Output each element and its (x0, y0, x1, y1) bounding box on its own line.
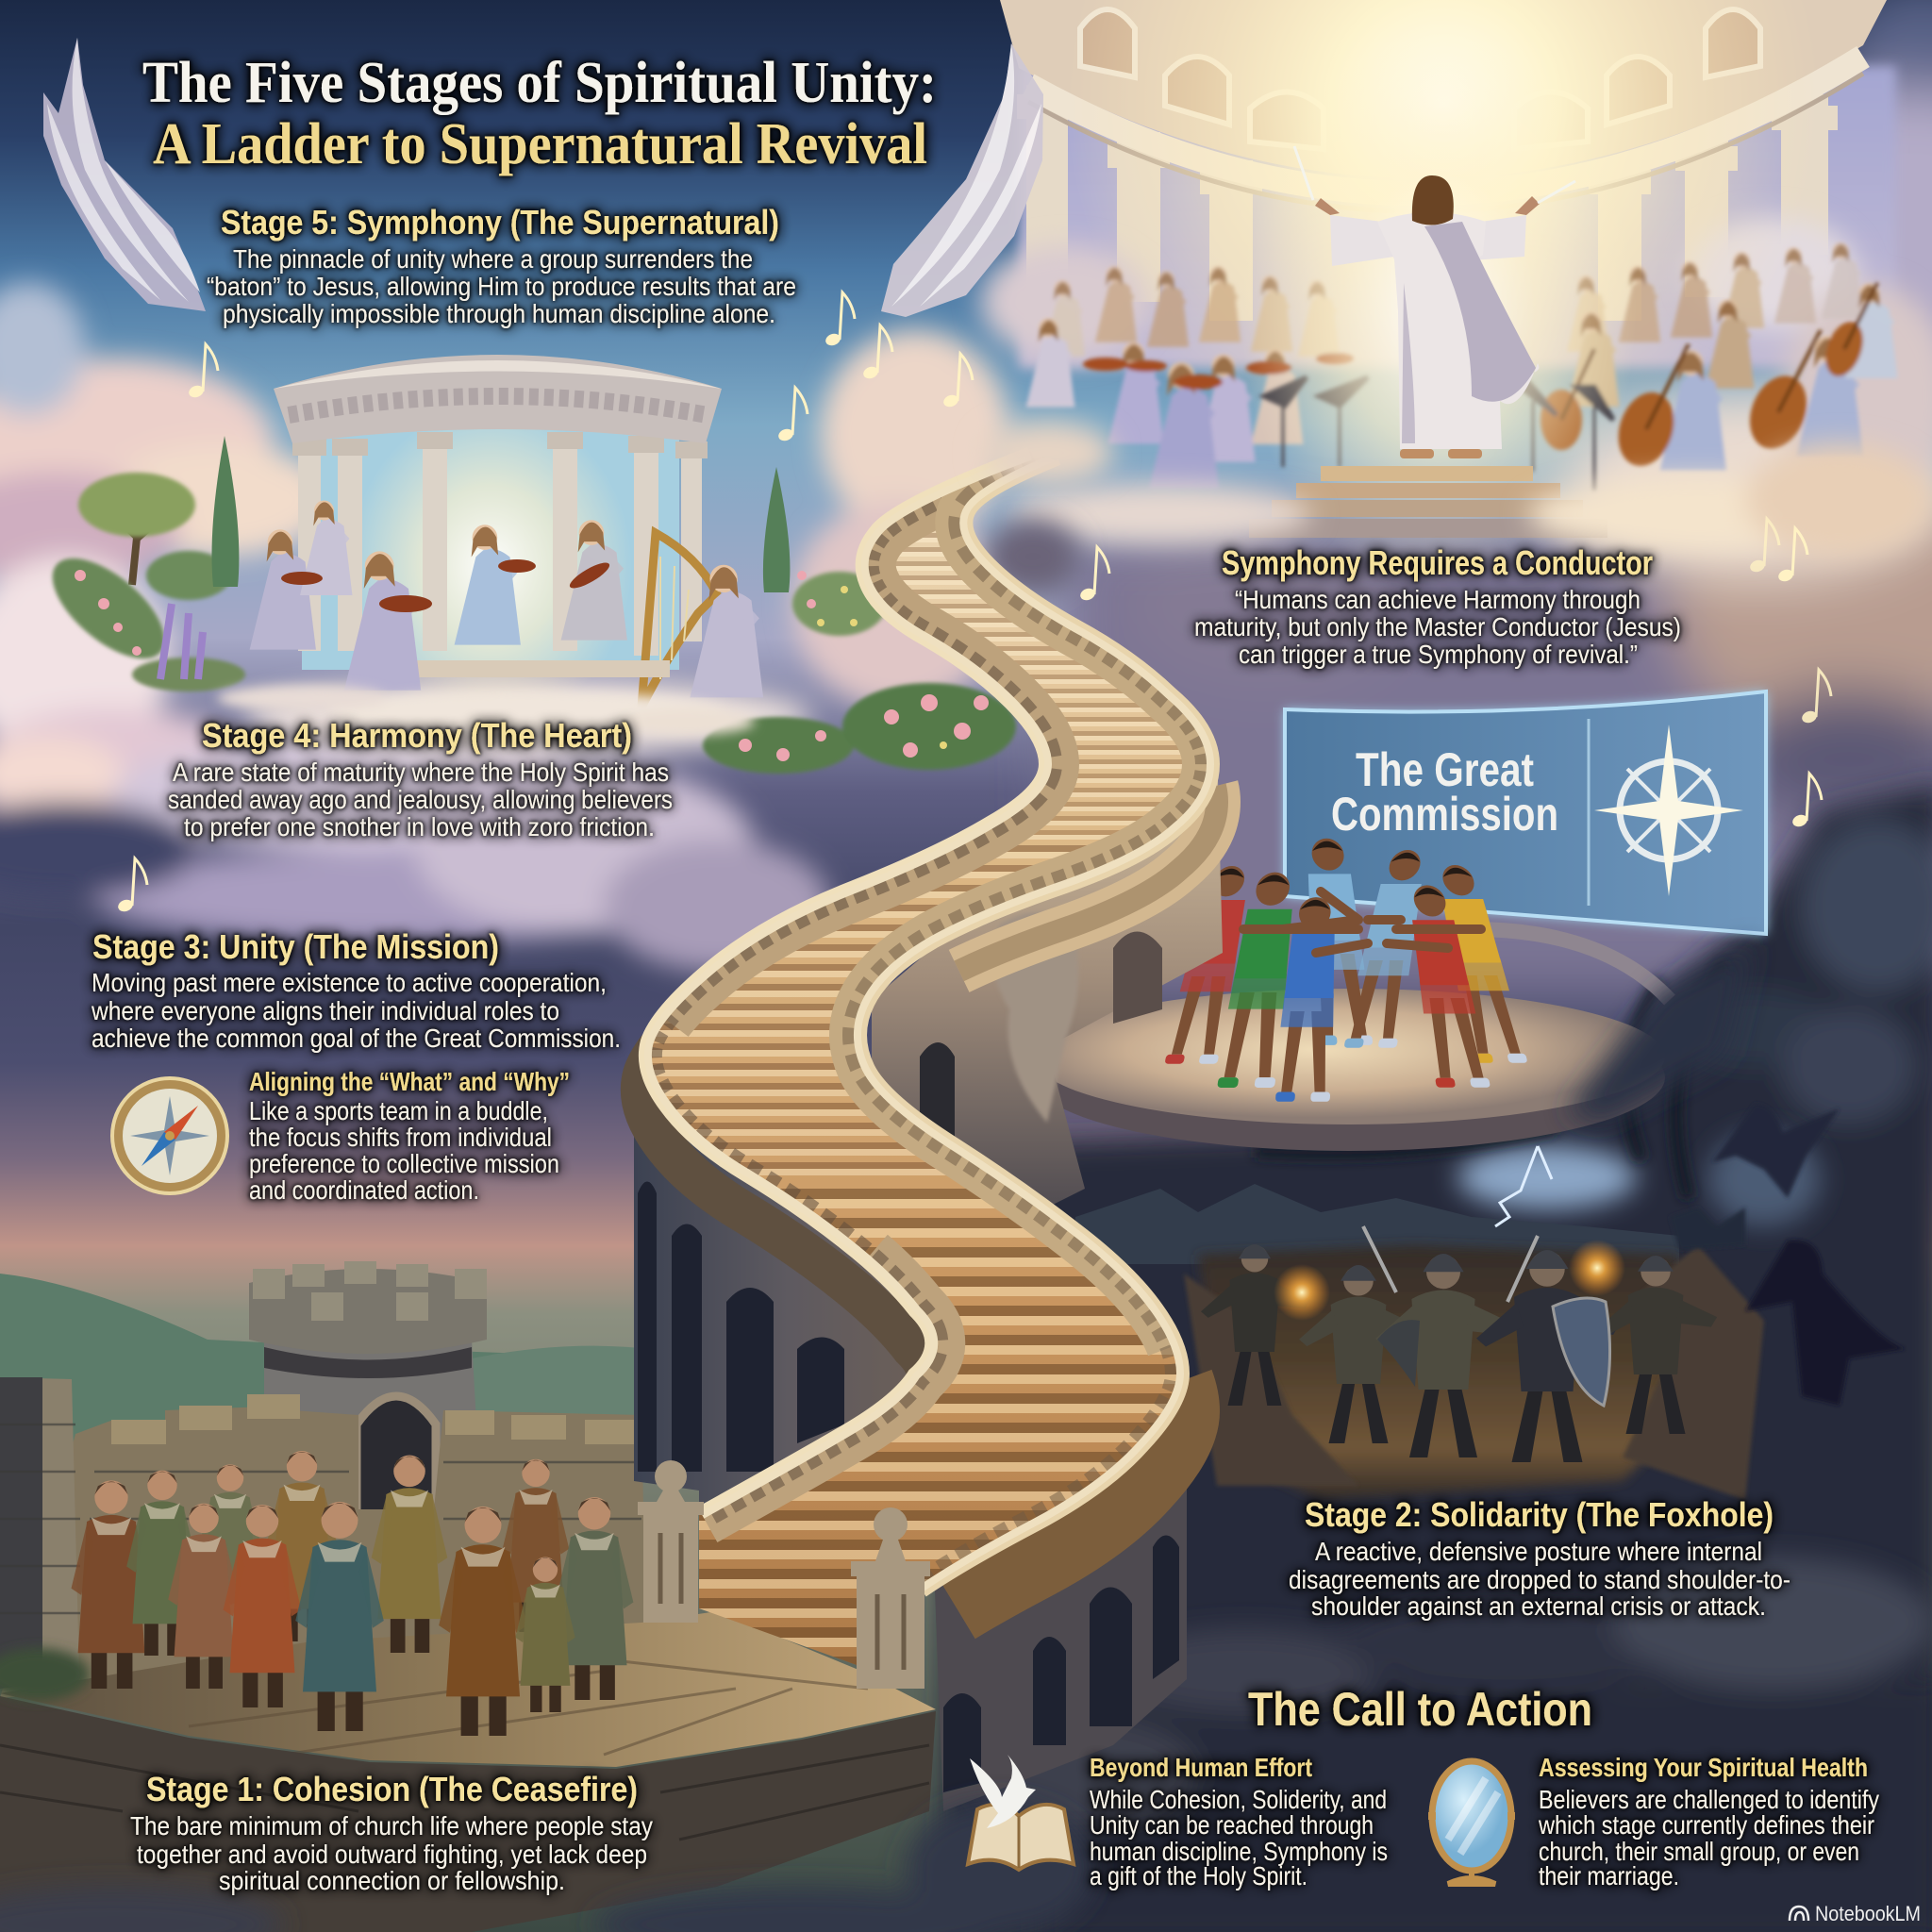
text: beyond human effort (1090, 1753, 1388, 1890)
text: stage 1: together and avoid outward fighting, yet lack deep (137, 1840, 647, 1869)
text: symphony requires a conductor: maturity, but only the Master Conductor (Jesus) (1194, 612, 1681, 641)
text: stage 1: spiritual connection or fellowship. (219, 1866, 565, 1895)
orchestra: left section (1026, 266, 1354, 489)
yellow flowers (817, 586, 947, 749)
text: stage 1: Stage 1: Cohesion (The Ceasefire) (146, 1770, 638, 1808)
icon: left angel wing (43, 38, 206, 311)
flowers (75, 570, 989, 761)
text: beyond human effort: human discipline, Symphony is (1090, 1837, 1388, 1866)
divine glow (1066, 0, 1821, 481)
dome arches (1080, 9, 1760, 149)
rocks (1184, 1245, 1764, 1500)
text: beyond human effort: While Cohesion, Soliderity, and (1090, 1785, 1387, 1814)
outer ornament band: left lower (641, 484, 1041, 1543)
door (357, 1396, 436, 1519)
heading: the call to action: The Call to Action (1248, 1683, 1592, 1736)
rotunda interior light (302, 425, 679, 670)
text: stage 3: achieve the common goal of the Great Commission. (92, 1024, 621, 1053)
haze inside upper loop (986, 519, 1080, 594)
cellos (1541, 317, 1870, 474)
scene: storm (943, 783, 1932, 1932)
clouds: under musicians (217, 685, 755, 735)
haze at stair top (981, 421, 1113, 485)
text: stage 4: A rare state of maturity where the Holy Spirit has (173, 758, 669, 787)
lavender (160, 604, 203, 679)
text: aligning the what and why: Like a sports team in a buddle, (249, 1096, 548, 1125)
text: stage 2: shoulder against an external crisis or attack. (1311, 1591, 1766, 1621)
temple interior sky gaps (1019, 66, 1896, 368)
screen heading: Commission (1331, 788, 1558, 841)
screen heading (1331, 743, 1558, 841)
sleeves (1330, 215, 1526, 266)
batons (1294, 146, 1575, 203)
icon: compass (112, 1078, 227, 1193)
temple dome (1000, 0, 1887, 178)
clouds: bottom foreground (0, 1802, 1094, 1932)
icon: mirror (1428, 1761, 1515, 1884)
text: stage 4: Stage 4: Harmony (The Heart) (202, 716, 632, 755)
arms (1315, 196, 1540, 215)
cloud over platform (1566, 943, 1755, 1123)
clouds: under orchestra (1009, 443, 1932, 557)
text: stage 4 (168, 716, 673, 841)
text: symphony requires a conductor: Symphony Requires a Conductor (1222, 543, 1653, 582)
cypress (211, 436, 790, 592)
background: right side mauve clouds (1057, 0, 1932, 1000)
text: stage 1: The bare minimum of church life where people stay (130, 1811, 653, 1840)
outer ornament band: right middle (864, 500, 1217, 1632)
temple cornice shade (1028, 74, 1863, 211)
soldiers (1201, 1226, 1717, 1462)
rotunda roof (274, 355, 722, 443)
cornice (289, 396, 708, 415)
joined hands (1243, 891, 1481, 953)
lightning (1495, 1146, 1552, 1226)
text: stage 4: sanded away ago and jealousy, allowing believers (168, 785, 673, 814)
trench (1198, 1245, 1689, 1500)
lower stone wall (0, 1696, 936, 1932)
inner ornament bands (641, 450, 1041, 1509)
platform top (1033, 989, 1665, 1124)
icon: music notes (116, 292, 1831, 913)
text: stage 3: Moving past mere existence to active cooperation, (92, 968, 607, 997)
orchestra: right section (1264, 242, 1898, 491)
text: stage 2: disagreements are dropped to stand shoulder-to- (1289, 1565, 1790, 1594)
arches (638, 932, 1179, 1792)
mountains (1075, 1184, 1679, 1264)
sky break (1457, 1145, 1637, 1209)
wall (0, 1406, 646, 1698)
figure: Jesus conducting (1249, 146, 1607, 538)
text: stage 3: Stage 3: Unity (The Mission) (92, 927, 499, 966)
text: stage 3: where everyone aligns their individual roles to (91, 996, 559, 1025)
violins (281, 558, 612, 612)
text: aligning the what and why: the focus shifts from individual (249, 1123, 552, 1152)
scene: castle (0, 1261, 936, 1932)
scene: heavenly temple (981, 0, 1932, 509)
middle lit wall (872, 745, 1223, 1217)
harp (641, 533, 717, 708)
podium steps (1249, 466, 1607, 538)
storm clouds (943, 783, 1932, 1932)
storm swirl (1255, 962, 1726, 1198)
text: assessing your spiritual health: their marriage. (1539, 1861, 1679, 1890)
temple entablature (1028, 57, 1863, 193)
hills (0, 1274, 660, 1472)
staircase rail outlines (641, 450, 1217, 1594)
outer ornament band: right lower (864, 500, 1217, 1632)
staircase: winding steps (623, 443, 1226, 1670)
icon: dove and open book (968, 1755, 1074, 1870)
watermark: NotebookLM: NotebookLM (1815, 1902, 1921, 1925)
text: stage 5: Stage 5: Symphony (The Supernatural) (221, 203, 779, 242)
clouds: left sky and pink cumulus (0, 283, 1009, 972)
musicians in rotunda (250, 500, 763, 708)
text: aligning the what and why: Aligning the “What” and “Why” (249, 1067, 570, 1096)
shield (1553, 1298, 1610, 1406)
title (142, 51, 937, 176)
conductor light column (1241, 38, 1637, 585)
crenel shadow (264, 1347, 472, 1378)
text: symphony requires a conductor: “Humans can achieve Harmony through (1235, 585, 1641, 614)
text: assessing your spiritual health: Assessing Your Spiritual Health (1539, 1753, 1868, 1782)
bush left (36, 541, 1016, 774)
text: stage 5: “baton” to Jesus, allowing Him to produce results that are (207, 272, 796, 301)
text: beyond human effort: Unity can be reached through (1090, 1810, 1374, 1840)
scene: rotunda (274, 355, 722, 726)
text: stage 2: Stage 2: Solidarity (The Foxhole) (1305, 1495, 1774, 1534)
text: stage 2 (1289, 1495, 1790, 1621)
lower left tower (634, 1057, 943, 1528)
gargoyle ornament (992, 912, 1078, 1123)
music stands (1264, 377, 1613, 420)
villagers (72, 1451, 633, 1736)
compass star icon (1594, 724, 1743, 896)
bush at wall (0, 1648, 90, 1701)
title: The Five Stages of Spiritual Unity: (142, 51, 937, 115)
masonry lines (0, 1424, 641, 1613)
rotunda capitals (292, 432, 708, 458)
hair and head (1412, 175, 1454, 225)
title: A Ladder to Supernatural Revival (153, 112, 927, 176)
lower right tower (934, 1387, 1187, 1811)
rotunda columns (298, 434, 702, 656)
merlons (111, 1394, 643, 1444)
rail lips (641, 450, 1041, 1509)
left wall block (0, 1377, 79, 1689)
icon: right angel wing (881, 43, 1043, 317)
distant hill right (472, 1346, 651, 1434)
text: beyond human effort: Beyond Human Effort (1090, 1753, 1312, 1782)
platform side (1033, 1004, 1665, 1151)
wraiths (1670, 1104, 1906, 1406)
text: stage 3 (91, 927, 621, 1053)
staircase understructure (634, 484, 1223, 1811)
great commission screen (1285, 691, 1766, 934)
text: assessing your spiritual health: which stage currently defines their (1538, 1810, 1874, 1840)
screen heading: The Great (1356, 743, 1534, 796)
text: stage 5: physically impossible through human discipline alone. (223, 299, 775, 328)
players (1164, 839, 1527, 1102)
text: assessing your spiritual health: church, their small group, or even (1539, 1837, 1859, 1866)
text: symphony requires a conductor (1194, 543, 1681, 669)
clouds: bottom right dark (972, 1557, 1932, 1932)
text: assessing your spiritual health (1538, 1753, 1879, 1890)
text: stage 4: to prefer one snother in love with zoro friction. (184, 812, 655, 841)
cobbled floor (0, 1611, 936, 1767)
temple columns (1017, 85, 1838, 321)
text: beyond human effort: a gift of the Holy Spirit. (1090, 1861, 1307, 1890)
tower (249, 1261, 487, 1519)
text: symphony requires a conductor: can trigger a true Symphony of revival.” (1239, 640, 1638, 669)
text: aligning the what and why: and coordinated action. (249, 1175, 479, 1205)
floor steps (415, 660, 670, 677)
text: stage 1 (130, 1770, 653, 1895)
scene: basketball platform (1033, 691, 1766, 1151)
back steps (1472, 929, 1670, 1000)
tree (108, 509, 170, 585)
text: stage 5 (207, 203, 796, 328)
text: stage 2: A reactive, defensive posture where internal (1315, 1537, 1762, 1566)
clouds in temple (981, 217, 1932, 509)
text: aligning the what and why: preference to collective mission (249, 1149, 559, 1178)
text: aligning the what and why (249, 1067, 570, 1205)
muzzle sparks (1274, 1240, 1625, 1321)
robe (1377, 212, 1539, 449)
garden: trees and bushes (36, 436, 1016, 774)
newel posts (638, 1460, 930, 1689)
text: stage 5: The pinnacle of unity where a group surrenders the (233, 244, 753, 274)
